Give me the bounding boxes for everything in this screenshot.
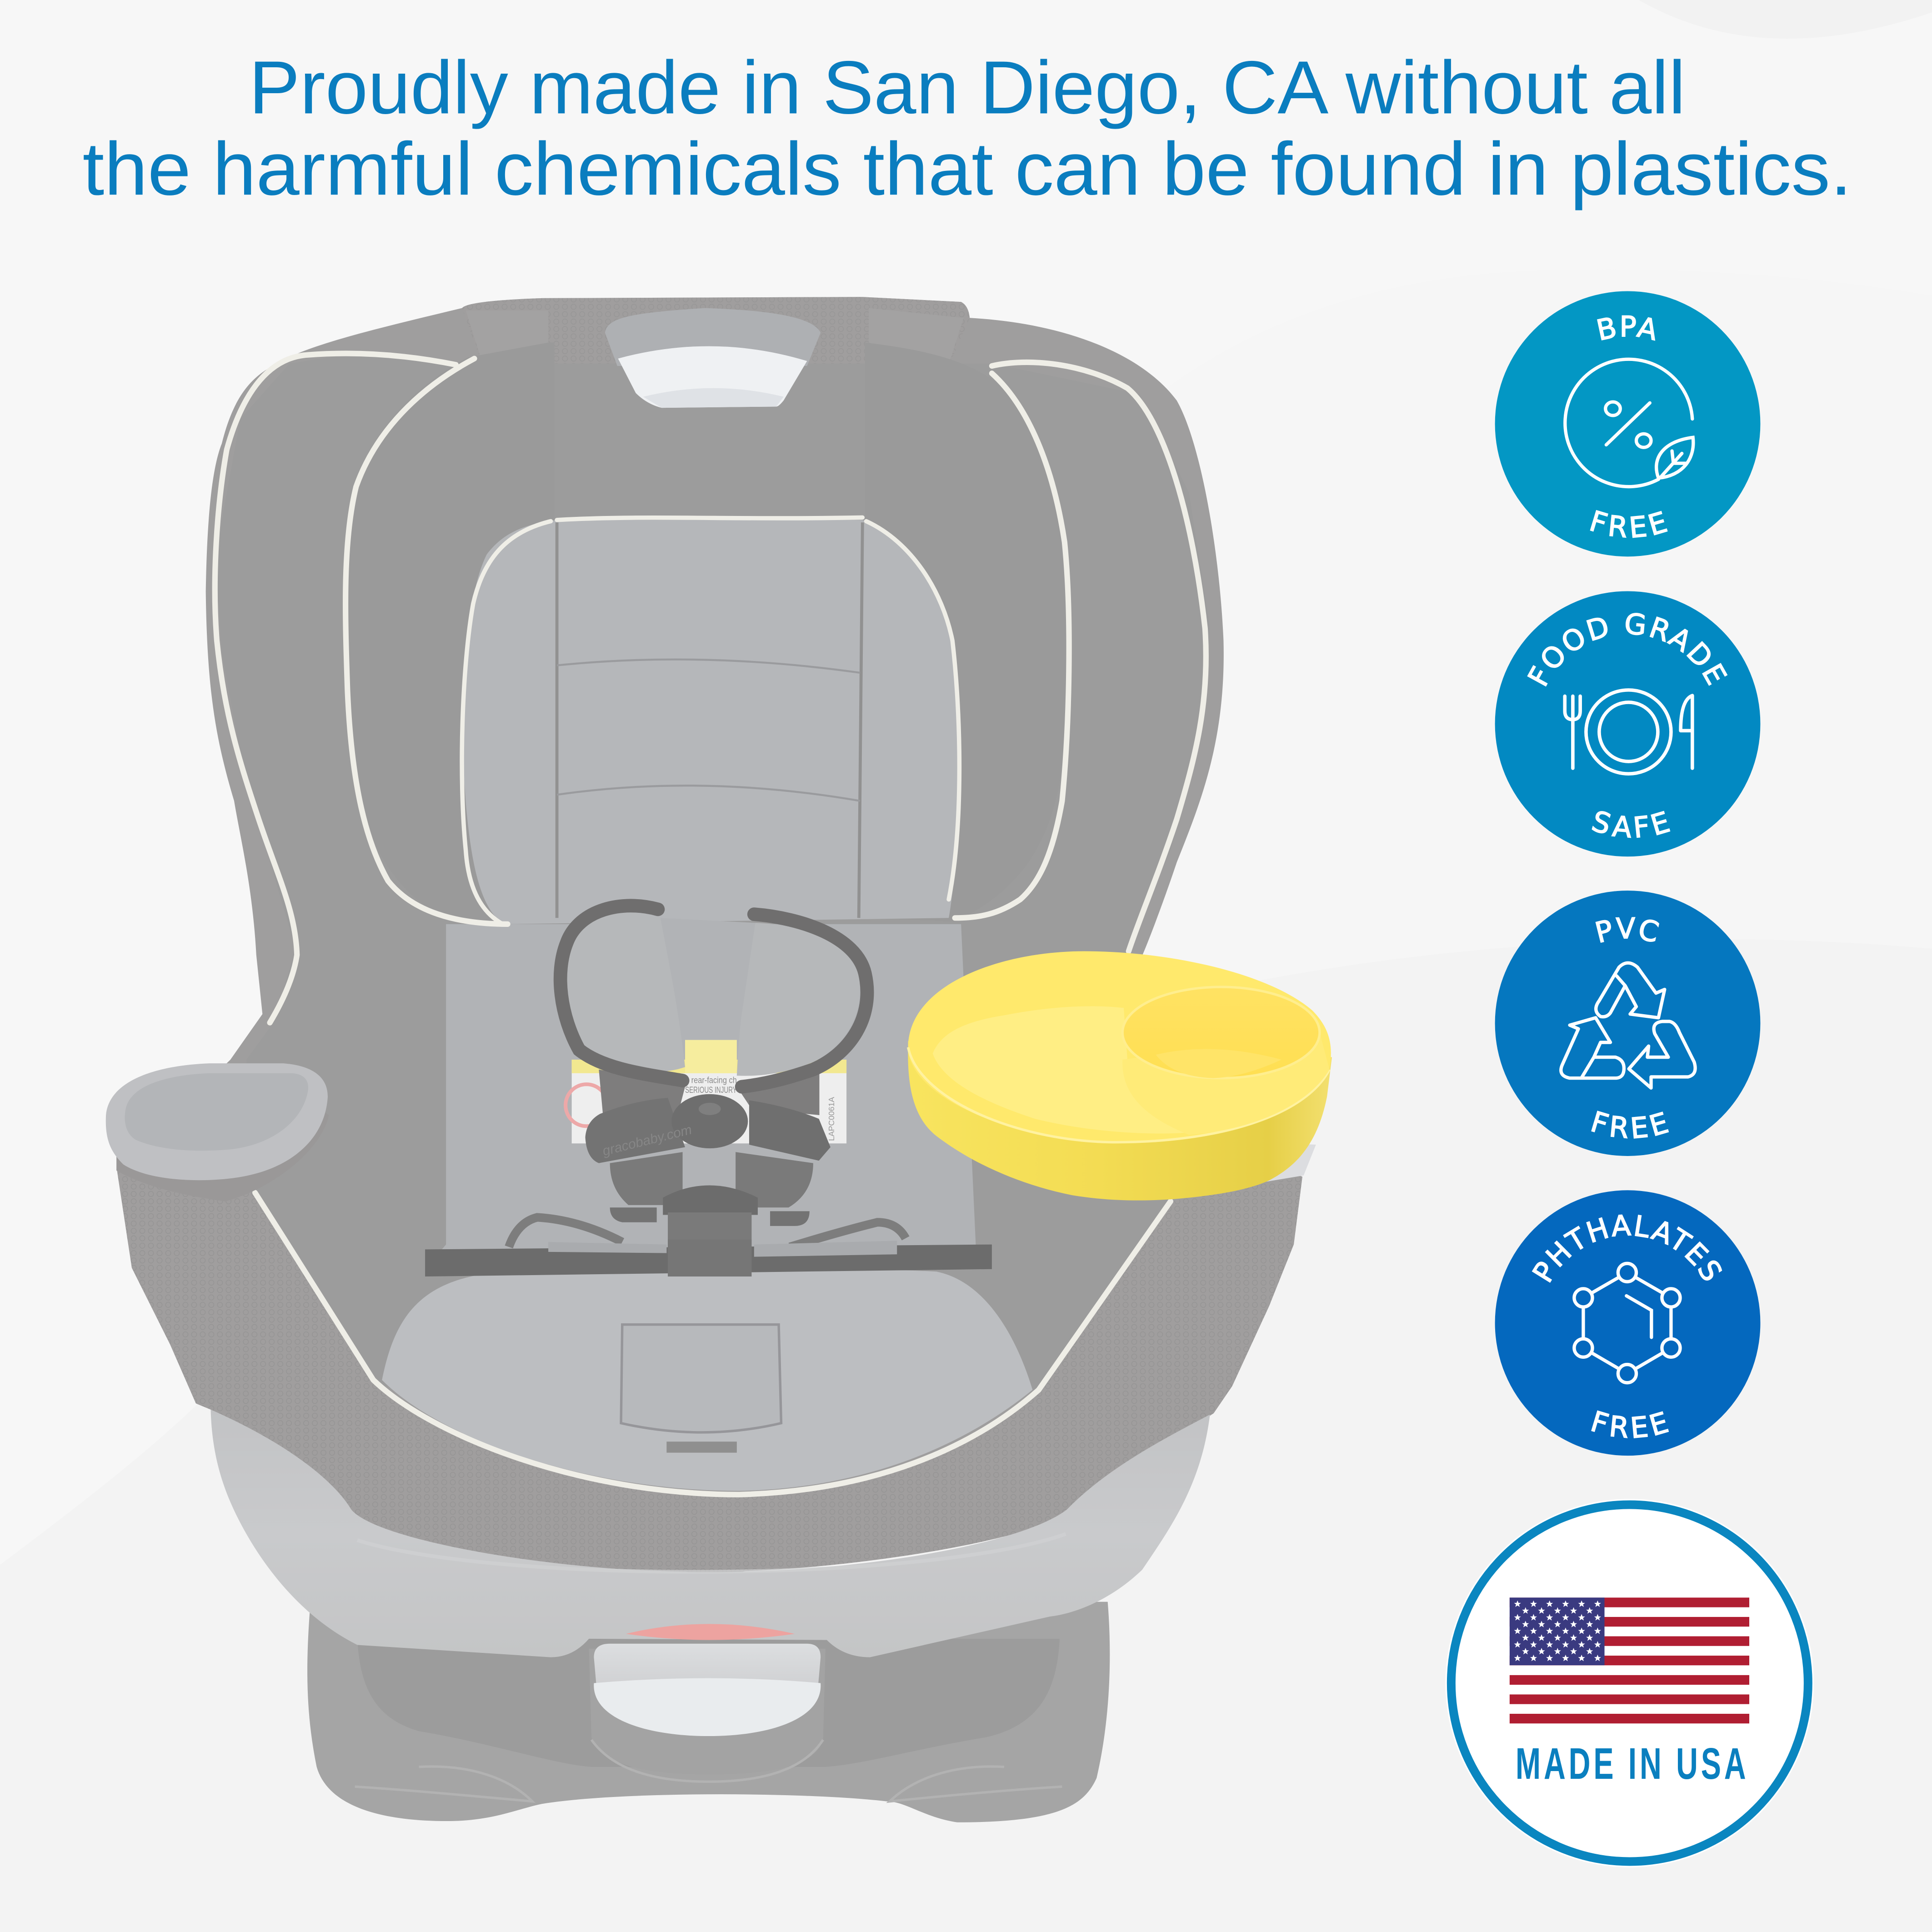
lower harness panel xyxy=(425,924,976,1269)
badge: PVC free: FREE xyxy=(1587,1105,1676,1145)
title: Proudly made in San Diego, CA without all xyxy=(249,45,1686,130)
made in USA label: MADE IN USA xyxy=(1516,1738,1746,1788)
badge: phthalates free: PHTHALATES xyxy=(1526,1209,1729,1288)
tray interior xyxy=(908,951,1331,1142)
badge: PVC free: PVC xyxy=(1592,912,1663,950)
badge: BPA free: BPA xyxy=(1594,310,1662,347)
icon: percent with leaf xyxy=(1565,359,1693,487)
warning label: LAPC0061A xyxy=(827,1097,836,1141)
badge: phthalates free: FREE xyxy=(1587,1405,1676,1445)
badge: BPA free xyxy=(1495,291,1760,556)
tray support xyxy=(1252,1142,1316,1184)
badge: PVC free xyxy=(1495,891,1760,1156)
badge: food grade safe: SAFE xyxy=(1588,804,1677,845)
center backrest panels xyxy=(463,520,959,924)
badge: made in USA xyxy=(1446,1499,1814,1867)
title: the harmful chemicals that can be found in plastics. xyxy=(83,127,1852,211)
front plastic lip xyxy=(210,1410,1210,1657)
chest clip and crotch strap xyxy=(425,1094,992,1276)
release handle indicator xyxy=(626,1624,795,1640)
seat cushion xyxy=(382,1268,1032,1491)
back shell and arms xyxy=(117,297,1302,1577)
icon: recycle arrows xyxy=(1561,963,1695,1088)
upper back wings xyxy=(345,343,1068,921)
chest clip and crotch strap: gracobaby.com xyxy=(601,1122,693,1159)
icon: molecule hexagon xyxy=(1574,1263,1680,1383)
title xyxy=(83,45,1852,211)
badge: food grade safe: FOOD GRADE xyxy=(1522,607,1734,692)
warning label: SERIOUS INJURY xyxy=(685,1086,737,1095)
seat base xyxy=(307,1602,1110,1822)
badge: BPA free: FREE xyxy=(1586,504,1674,545)
icon: American flag xyxy=(1510,1597,1749,1723)
shoulder straps xyxy=(599,1070,819,1124)
icon: plate and cutlery xyxy=(1565,690,1692,774)
shoulder pads xyxy=(561,906,867,1087)
tray body xyxy=(908,1041,1332,1201)
badge: food grade safe xyxy=(1495,591,1760,856)
white piping xyxy=(215,354,1206,1495)
car seat xyxy=(106,297,1302,1822)
headrest handle xyxy=(605,308,821,408)
cup well xyxy=(1122,987,1330,1135)
warning label: e rear-facing ch xyxy=(685,1076,737,1085)
warning label xyxy=(566,1060,846,1143)
yellow tray xyxy=(908,951,1332,1201)
badge: phthalates free xyxy=(1495,1190,1760,1456)
left cup holder xyxy=(106,1063,329,1201)
pedal xyxy=(594,1644,821,1736)
